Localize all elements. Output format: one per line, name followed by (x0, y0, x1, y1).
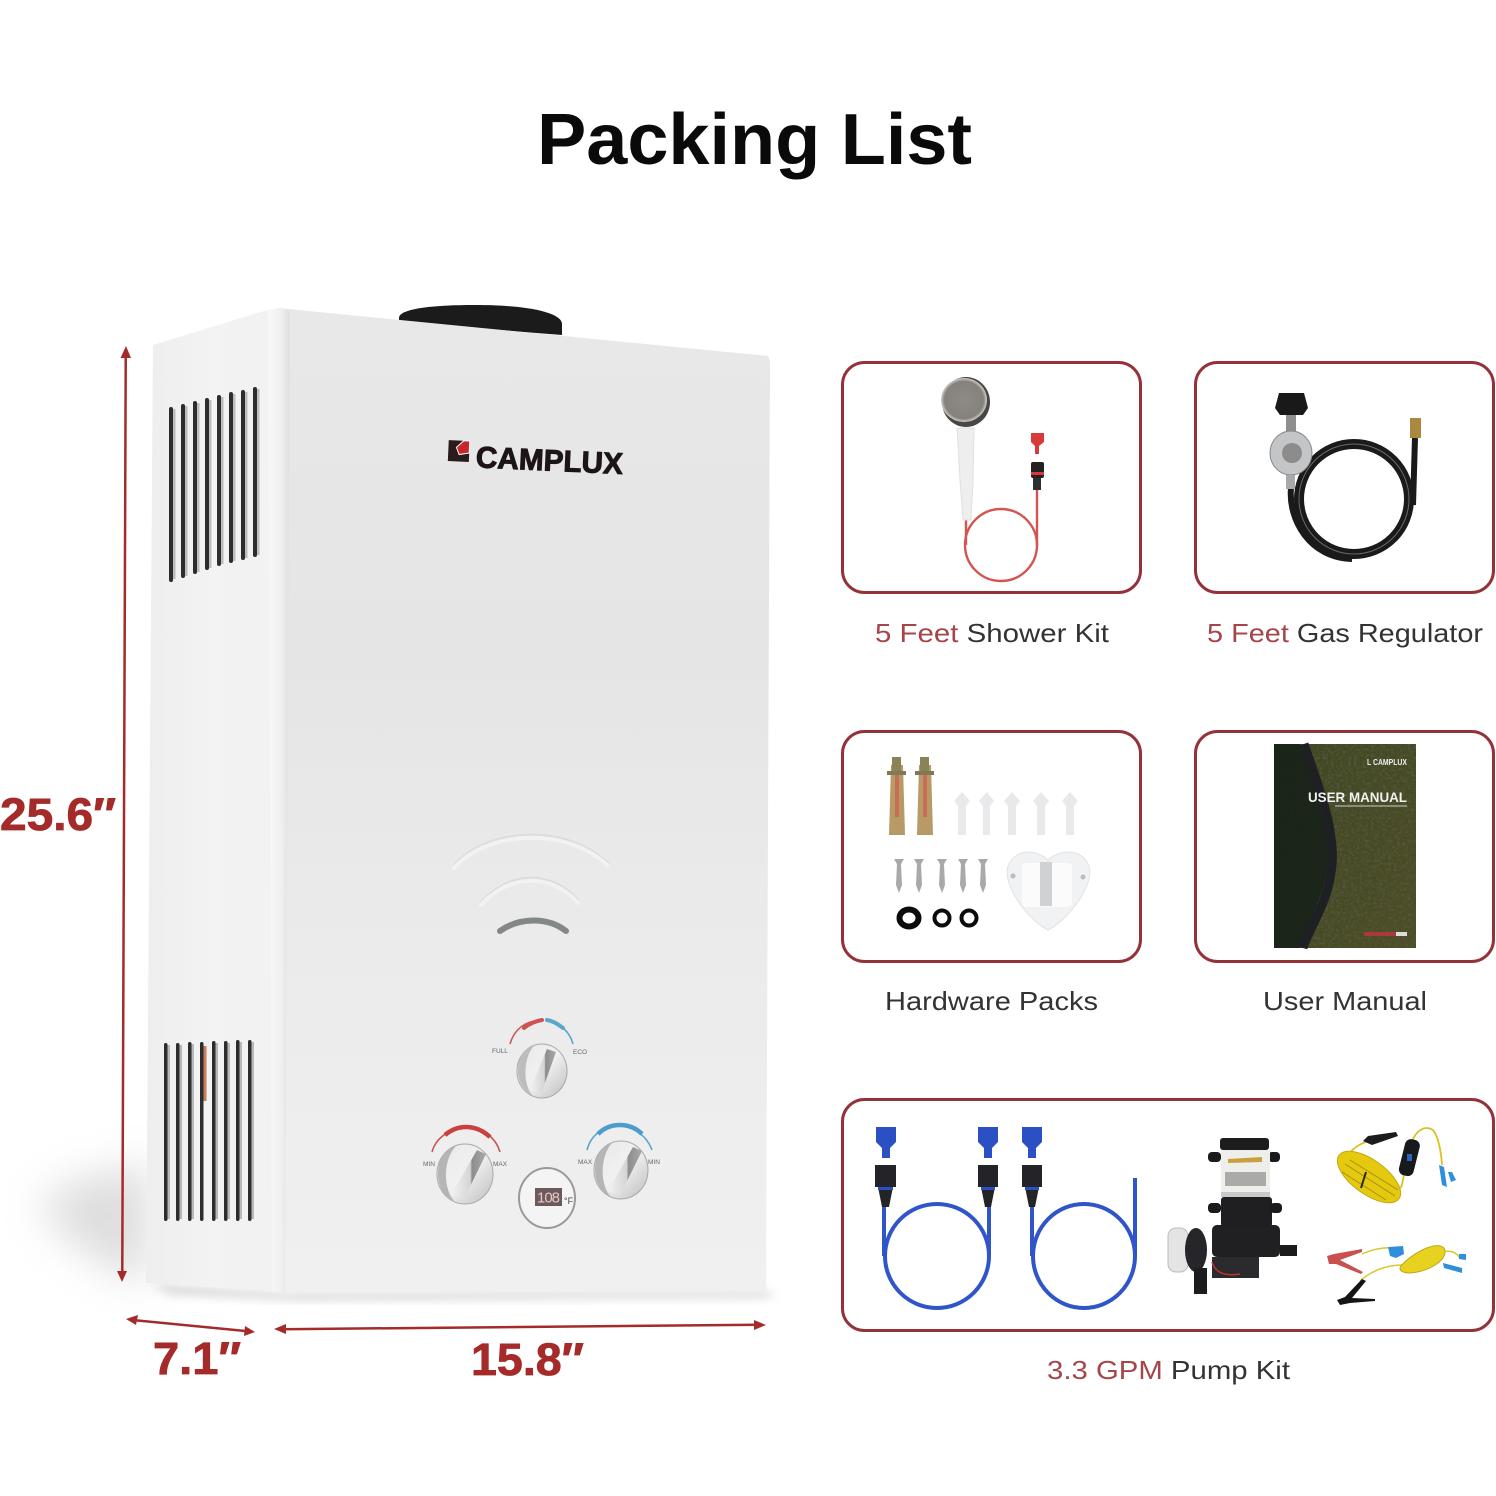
icon: manual booklet (1274, 744, 1416, 948)
left temperature knob: MAX (493, 1161, 508, 1168)
floor shadow (40, 1165, 150, 1282)
right water knob: MAX (578, 1159, 593, 1166)
panel: shower kit (842, 362, 1140, 592)
front panel (278, 308, 770, 1292)
icon: screws (894, 859, 988, 893)
digital temperature display: °F (564, 1196, 574, 1206)
side panel (146, 308, 283, 1292)
panel: hardware packs (842, 732, 1140, 962)
height dimension arrow (117, 346, 131, 1282)
icon: rubber washers (900, 910, 976, 926)
bottom shadow (150, 1284, 775, 1300)
icon: shower handle (957, 428, 974, 520)
icon: blue hoses (884, 1178, 1135, 1308)
caption: user manual: User Manual (1263, 986, 1427, 1016)
icon: expansion bolts (887, 757, 934, 835)
top gas knob: FULL (492, 1048, 508, 1055)
upper vents (169, 387, 260, 582)
lower vents (164, 1040, 254, 1221)
icon: shower hose (965, 488, 1037, 581)
width label: 15.8″ (471, 1334, 584, 1385)
top gas knob (492, 1020, 587, 1098)
panel: user manual (1196, 732, 1494, 962)
caption: shower kit: 5 Feet Shower Kit (875, 618, 1110, 648)
icon: wall plugs (954, 792, 1078, 835)
icon: hose connectors (875, 1127, 1042, 1207)
depth label: 7.1″ (153, 1333, 241, 1384)
top gas knob: ECO (573, 1049, 587, 1056)
flue cap (399, 305, 562, 335)
height label: 25.6″ (0, 789, 116, 840)
caption: pump kit: 3.3 GPM Pump Kit (1047, 1355, 1291, 1385)
icon: brass fitting (1410, 418, 1421, 438)
digital temperature display (519, 1168, 575, 1228)
logo wordmark: CAMPLUX (475, 441, 624, 481)
water heater product (40, 305, 775, 1300)
depth dimension arrow (126, 1315, 255, 1336)
corner bevel (268, 308, 290, 1292)
icon: manual booklet: L CAMPLUX (1367, 758, 1408, 767)
caption: hardware packs: Hardware Packs (885, 986, 1098, 1016)
title: Packing List (537, 100, 972, 180)
embossed flame waves (454, 835, 608, 905)
icon: red hose connector (1031, 433, 1044, 490)
width dimension arrow (274, 1320, 766, 1334)
right water knob: MIN (648, 1159, 660, 1166)
digital temperature display: 108 (537, 1190, 560, 1206)
logo mark (448, 440, 470, 462)
icon: shower head (941, 377, 990, 427)
icon: cigarette lighter power cable (1329, 1128, 1456, 1213)
icon: manual booklet: USER MANUAL (1308, 789, 1407, 805)
left temperature knob: MIN (423, 1161, 435, 1168)
panel: pump kit (842, 1100, 1494, 1330)
brand logo (447, 440, 624, 481)
indicator window (500, 920, 566, 931)
left temperature knob (423, 1127, 508, 1204)
icon: shower bracket (1007, 852, 1090, 930)
icon: black gas hose (1291, 438, 1415, 559)
icon: water pump (1168, 1138, 1297, 1294)
caption: gas regulator: 5 Feet Gas Regulator (1207, 618, 1483, 648)
right water knob (578, 1125, 660, 1199)
panel: gas regulator (1196, 362, 1494, 592)
icon: regulator valve (1270, 393, 1312, 489)
icon: battery clip cable (1327, 1246, 1466, 1305)
